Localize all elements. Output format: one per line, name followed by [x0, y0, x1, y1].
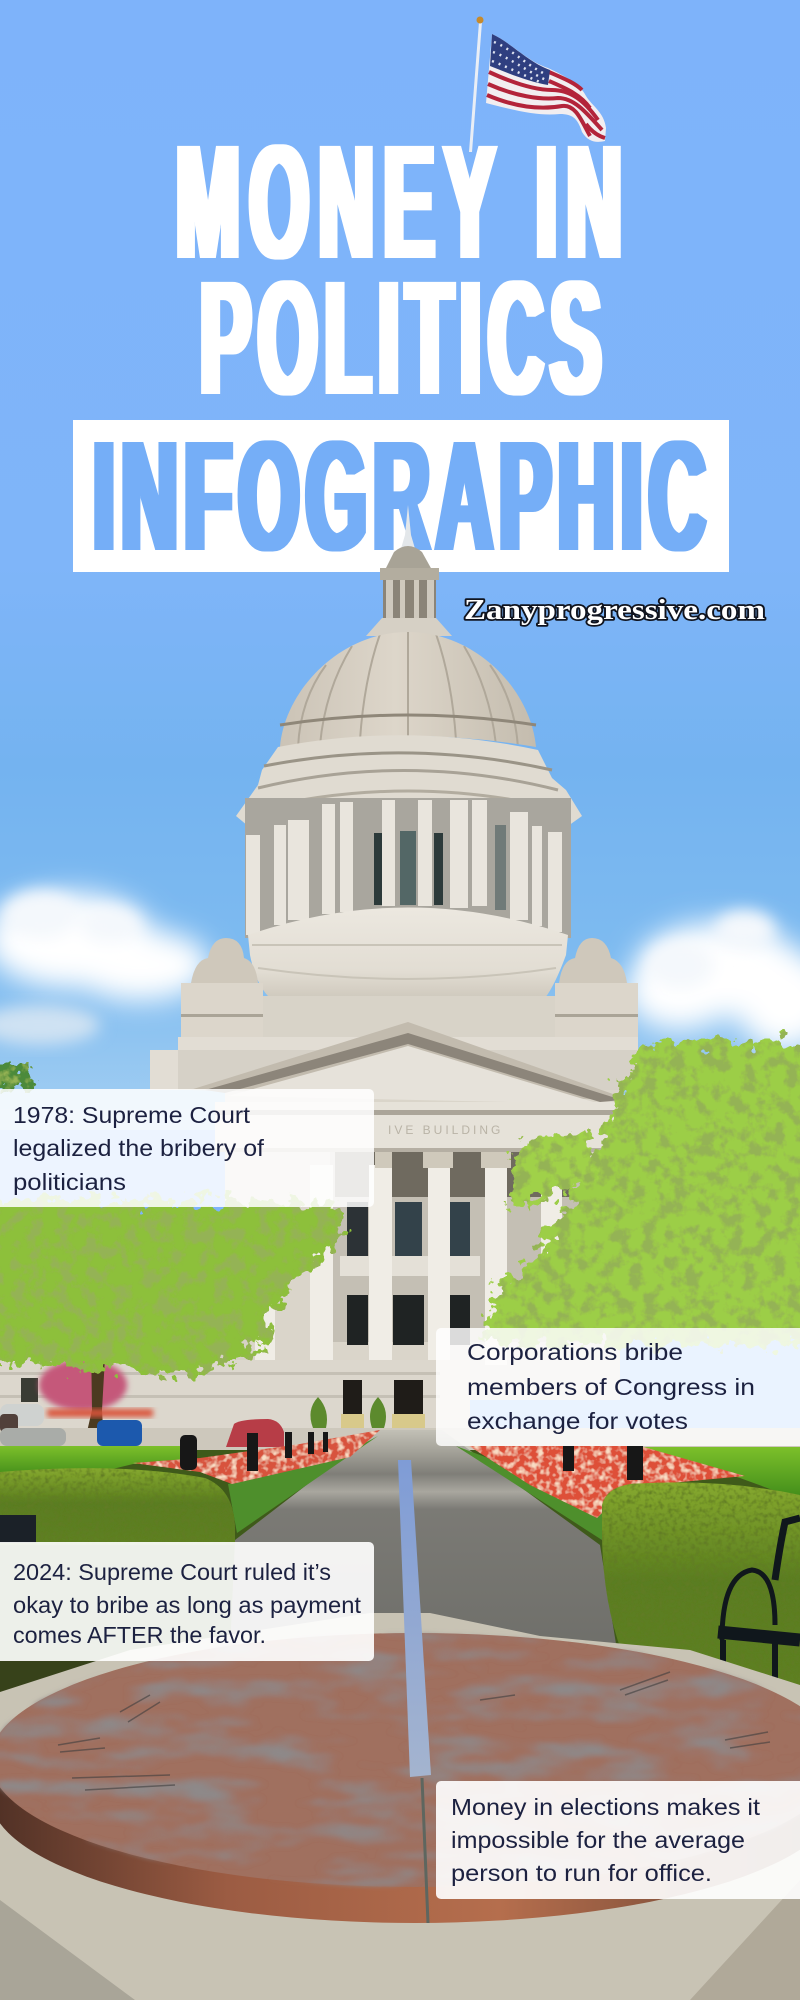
parked cars [0, 1404, 284, 1447]
title banner: INFOGRAPHIC: INFOGRAPHIC [93, 410, 712, 584]
right hedge [602, 1482, 800, 1700]
background flower beds orange strip [47, 1409, 153, 1417]
callout: corporations bribe Congress: members of Congress in [467, 1374, 755, 1400]
callout: 1978 ruling: politicians [13, 1169, 126, 1195]
ground: forecourt and backing hedges [0, 1428, 800, 1700]
capitol building [0, 505, 640, 1430]
title line: MONEY IN: MONEY IN [176, 111, 631, 293]
pediment [190, 1022, 630, 1104]
right pavilion [555, 938, 638, 1038]
drum colonnade [245, 798, 571, 938]
callout: money in elections: impossible for the average [451, 1827, 745, 1853]
left tree [0, 1065, 342, 1445]
right flower bed [456, 1446, 745, 1540]
left flower bed [133, 1430, 380, 1533]
callout: money in elections: Money in elections makes it [451, 1794, 761, 1820]
left hedge [0, 1468, 235, 1545]
right tree [478, 1040, 800, 1345]
callout: corporations bribe Congress [436, 1328, 800, 1446]
main dome [280, 632, 536, 748]
callout: 2024 ruling: 2024: Supreme Court ruled it’s [13, 1559, 331, 1585]
portico windows and doors [330, 1152, 590, 1345]
callout: 1978 ruling [0, 1089, 374, 1207]
lower drum [248, 908, 568, 998]
website credit: Zanyprogressive.com [464, 594, 765, 626]
park bench [718, 1518, 800, 1680]
callout: corporations bribe Congress: Corporations bribe [467, 1339, 683, 1365]
background: blue sky [0, 0, 800, 1130]
callout: 2024 ruling: okay to bribe as long as payment [13, 1592, 361, 1618]
callout: 2024 ruling: comes AFTER the favor. [13, 1622, 266, 1648]
callout: 1978 ruling: legalized the bribery of [13, 1135, 264, 1161]
ground floor wall [0, 1290, 470, 1430]
left pavilion [181, 938, 263, 1038]
attic wall and parapet [263, 996, 555, 1040]
sundial gnomon [398, 1460, 431, 1777]
walkway [230, 1430, 617, 1650]
entablature [215, 1102, 618, 1152]
title line: POLITICS: POLITICS [200, 247, 608, 429]
clouds [0, 891, 800, 1050]
lantern and spire [366, 505, 452, 636]
concrete pedestal [0, 1613, 800, 2000]
callout: money in elections [436, 1781, 800, 1899]
callout: money in elections: person to run for office. [451, 1860, 712, 1886]
entablature: IVE BUILDING [388, 1123, 503, 1137]
portico columns [255, 1165, 562, 1365]
copper sundial [0, 1633, 800, 1923]
callout: 2024 ruling [0, 1542, 374, 1661]
icon: American flag on pole [469, 16, 606, 152]
callout: 1978 ruling: 1978: Supreme Court [13, 1102, 250, 1128]
bollards [180, 1432, 643, 1480]
drum upper entablature [236, 735, 582, 826]
dark shrubs and bench behind left callout [0, 1515, 150, 1692]
callout: corporations bribe Congress: exchange for votes [467, 1408, 688, 1434]
portico body [225, 1090, 620, 1400]
small pink tree and shrubs [39, 1359, 386, 1428]
